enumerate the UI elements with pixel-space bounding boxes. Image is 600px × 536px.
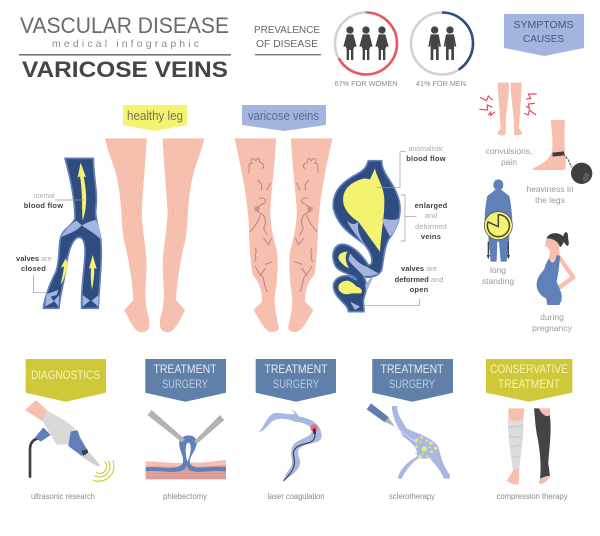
label: women share: 67% FOR WOMEN xyxy=(334,79,398,88)
leader: enlarged veins xyxy=(401,195,417,241)
caption: sclerotherapy: sclerotherapy xyxy=(389,492,435,501)
panel: diagnostics xyxy=(25,359,114,501)
label: normal blood flow: blood flow xyxy=(24,201,63,210)
panel: phlebectomy xyxy=(145,359,226,501)
banner: treatment surgery xyxy=(145,359,226,402)
label: anomalistic blood flow: blood flow xyxy=(406,154,446,163)
banner: diagnostics: DIAGNOSTICS xyxy=(31,370,100,382)
leader: open valves xyxy=(364,299,419,306)
symptom: convulsions, pain: pain xyxy=(501,157,517,167)
label: valves are closed xyxy=(16,254,52,273)
banner: conservative treatment: CONSERVATIVE xyxy=(490,364,568,376)
symptom: heaviness in the legs: heaviness in xyxy=(526,184,574,194)
label: enlarged and deformed veins: enlarged xyxy=(415,201,448,210)
valves xyxy=(45,220,101,307)
label: valves deformed and open: deformed and xyxy=(395,275,443,284)
label: valves deformed and open: open xyxy=(410,285,429,294)
icon: forceps on vein xyxy=(146,410,226,479)
label: enlarged and deformed veins xyxy=(415,201,448,241)
banner: treatment surgery: SURGERY xyxy=(162,379,208,391)
subtitle: medical infographic xyxy=(52,38,199,50)
prevalence heading: PREVALENCE xyxy=(254,25,320,36)
banner: treatment surgery: TREATMENT xyxy=(154,364,216,376)
symptom: during pregnancy: pregnancy xyxy=(532,323,573,333)
icon: standing person with clock xyxy=(484,179,512,262)
panel: compression therapy xyxy=(486,359,572,501)
label: anomalistic blood flow xyxy=(406,146,446,163)
illustration: varicose legs xyxy=(235,138,332,332)
banner: treatment surgery xyxy=(372,359,453,402)
right varicose leg xyxy=(288,138,332,332)
arrows xyxy=(60,163,97,289)
diagram: normal vein xyxy=(33,158,101,308)
symptom: long standing: standing xyxy=(482,276,514,286)
label: valves deformed and open xyxy=(395,264,443,294)
heading: varicose veins: VARICOSE VEINS xyxy=(22,57,228,82)
diagram: varicose vein xyxy=(333,152,419,312)
chart: men prevalence xyxy=(411,12,473,88)
title: vascular disease: VASCULAR DISEASE xyxy=(20,13,229,38)
banner: symptoms causes: SYMPTOMS xyxy=(514,19,574,31)
prevalence heading: OF DISEASE xyxy=(256,39,318,50)
banner: conservative treatment: TREATMENT xyxy=(498,379,560,391)
banner: healthy leg: healthy leg xyxy=(127,108,183,123)
chart: women prevalence xyxy=(334,12,398,88)
label: normal blood flow: normal xyxy=(33,193,55,200)
icon: pregnant woman xyxy=(537,232,573,305)
symptom: during pregnancy xyxy=(532,232,573,333)
icon: aching legs xyxy=(479,83,537,135)
prevalence heading xyxy=(254,25,321,55)
caption: compression therapy: compression therapy xyxy=(496,492,568,501)
banner: treatment surgery: SURGERY xyxy=(389,379,435,391)
icon: syringe and vein xyxy=(367,403,450,479)
banner: treatment surgery: TREATMENT xyxy=(380,364,444,376)
symptom: long standing: long xyxy=(490,265,506,275)
label: men share: 41% FOR MEN xyxy=(416,79,466,88)
symptom: long standing xyxy=(482,179,514,286)
symptom: during pregnancy: during xyxy=(540,312,564,322)
banner: symptoms causes xyxy=(504,14,584,56)
banner: varicose veins xyxy=(242,105,326,131)
illustration: healthy legs xyxy=(105,138,204,332)
symptom: convulsions, pain: convulsions, xyxy=(486,146,532,156)
label: valves are closed: closed xyxy=(21,264,46,273)
banner: treatment surgery: SURGERY xyxy=(273,379,319,391)
icon: two men xyxy=(428,26,456,60)
banner: healthy leg xyxy=(123,105,187,131)
label: valves are closed: valves are xyxy=(16,254,52,263)
icon: bandage and stocking xyxy=(507,408,551,485)
caption: phlebectomy: phlebectomy xyxy=(163,492,207,501)
label: normal blood flow xyxy=(24,193,63,210)
label: anomalistic blood flow: anomalistic xyxy=(408,146,444,153)
banner: symptoms causes: CAUSES xyxy=(523,33,564,45)
left varicose leg xyxy=(235,138,279,332)
title block xyxy=(19,13,231,82)
leader: normal flow xyxy=(55,199,84,201)
leader: anomalistic flow xyxy=(377,152,406,187)
deformed valves xyxy=(347,218,399,310)
yellow blood pools xyxy=(338,168,384,294)
banner: conservative treatment xyxy=(486,359,572,402)
symptom: heaviness in the legs xyxy=(526,120,592,205)
label: enlarged and deformed veins: and xyxy=(425,211,437,220)
banner: treatment surgery: TREATMENT xyxy=(264,364,328,376)
symptom: heaviness in the legs: the legs xyxy=(535,195,565,205)
icon: three women xyxy=(343,26,389,60)
icon: ultrasound probe xyxy=(25,400,114,481)
banner: diagnostics xyxy=(26,359,106,402)
label: enlarged and deformed veins: veins xyxy=(421,232,441,241)
panel: sclerotherapy xyxy=(367,359,453,501)
label: valves deformed and open: valves are xyxy=(401,264,437,273)
panel: laser coagulation xyxy=(256,359,336,501)
icon: foot with ball and chain xyxy=(532,120,592,184)
symptom: convulsions, pain xyxy=(479,83,537,167)
banner: varicose veins: varicose veins xyxy=(248,108,319,123)
label: enlarged and deformed veins: deformed xyxy=(415,222,447,231)
caption: ultrasonic research: ultrasonic research xyxy=(31,492,95,501)
icon: laser in vein xyxy=(257,409,322,481)
leader: valves closed xyxy=(33,275,47,293)
banner: treatment surgery xyxy=(256,359,336,402)
caption: laser coagulation: laser coagulation xyxy=(268,492,324,501)
